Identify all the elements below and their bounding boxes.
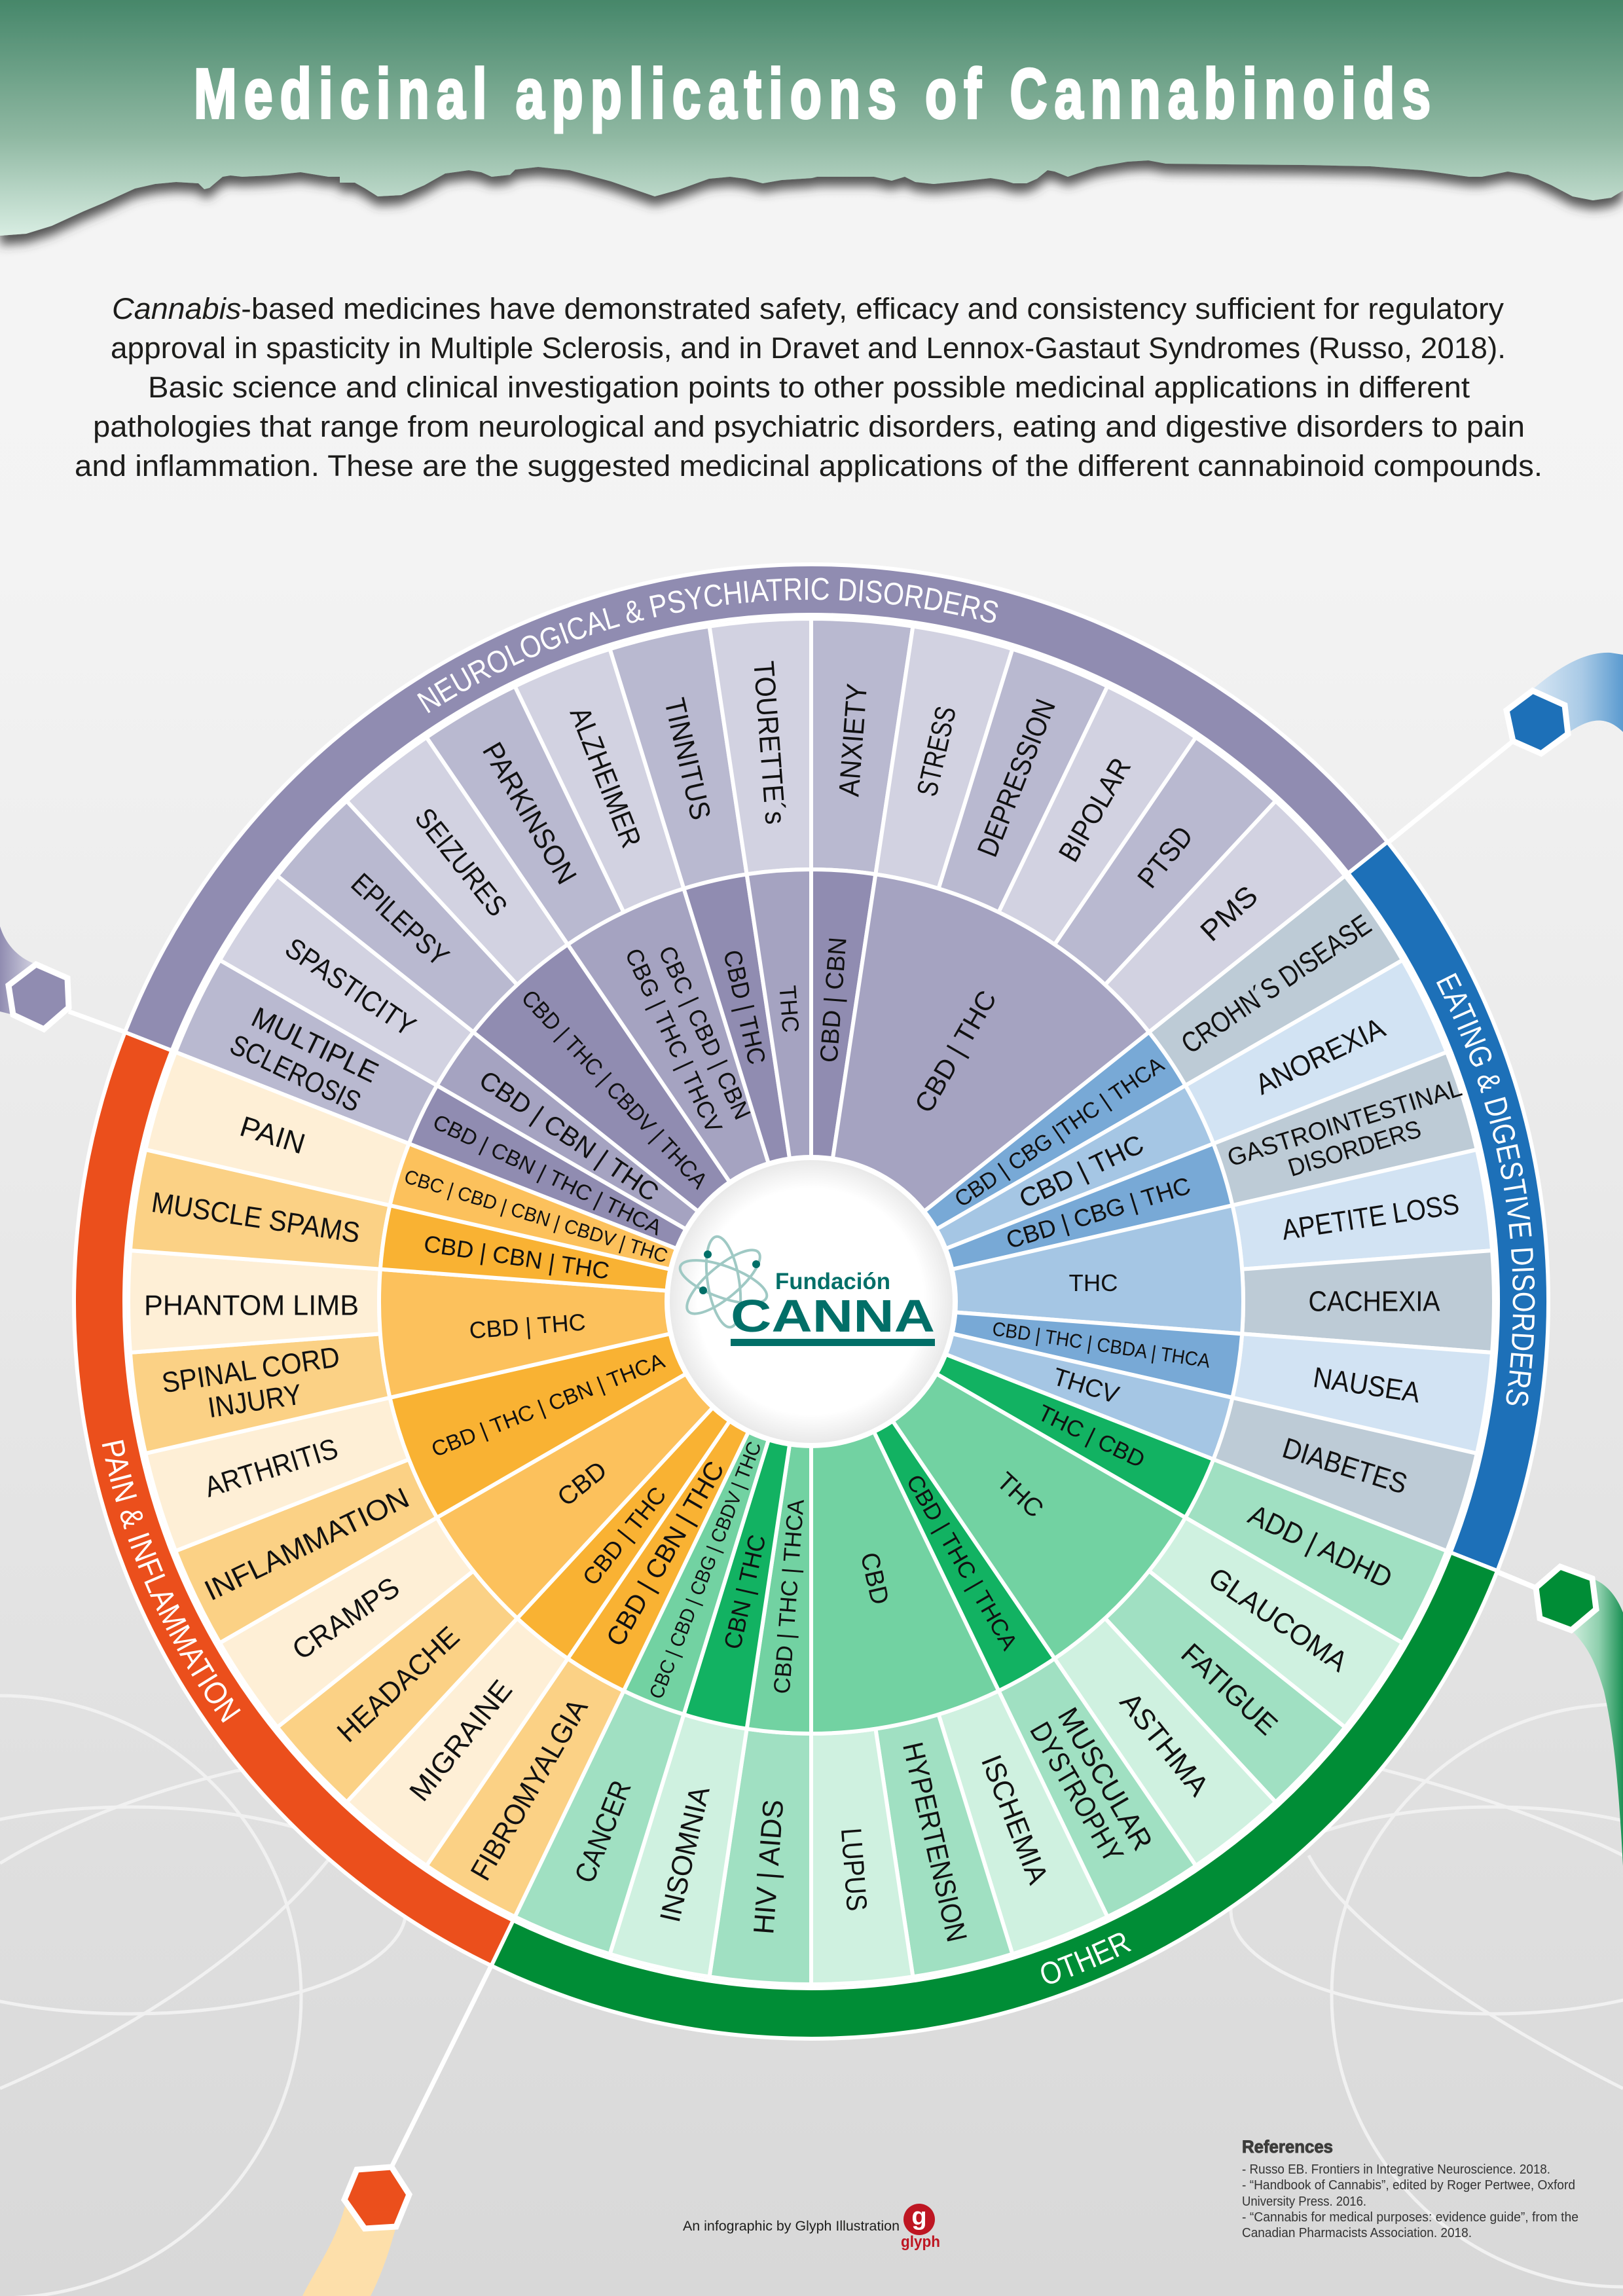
wedge: CBD CBN THC bbox=[437, 1030, 843, 1302]
segment: epilepsy: EPILEPSY bbox=[345, 867, 455, 973]
wedge: CBD THC: CBD | THC bbox=[1014, 1129, 1148, 1214]
wedge: CBD THC small bbox=[684, 869, 873, 1302]
segment: lupus bbox=[775, 1724, 913, 1992]
band: neurological and psychiatric disorders: NEUROLOGICAL & PSYCHIATRIC DISORDERS bbox=[417, 577, 998, 714]
segment: headache bbox=[272, 1546, 520, 1802]
segment: pms: PMS bbox=[1194, 880, 1264, 948]
segment: tinnitus bbox=[610, 619, 782, 893]
segment: multiple sclerosis: MULTIPLE bbox=[247, 1001, 383, 1089]
logo: Fundación CANNA bbox=[675, 1234, 935, 1346]
segment: add adhd: ADD | ADHD bbox=[1243, 1499, 1397, 1595]
segment: bipolar bbox=[996, 686, 1199, 960]
intro paragraph: pathologies that range from neurological and psychiatric disorders, eating and digestive disorders to pain bbox=[93, 410, 1525, 443]
wedge: CBC CBD CBN and CBG THC THCV bbox=[568, 873, 917, 1302]
segment: pain: PAIN bbox=[236, 1110, 309, 1161]
wedge: CBD CBG THC: CBD | CBG | THC bbox=[1003, 1172, 1194, 1254]
segment: cramps bbox=[214, 1488, 477, 1727]
ring: pain and inflammation conditions bbox=[122, 1050, 626, 1917]
wedge: CBD THC: CBD | THC bbox=[577, 1482, 672, 1590]
wedge: CBD THC large bbox=[811, 874, 1166, 1345]
connector: pain ribbon, line and hexagon bbox=[302, 1963, 492, 2296]
segment: asthma: ASTHMA bbox=[1114, 1686, 1215, 1802]
icon: atom bbox=[675, 1234, 772, 1330]
segment: nausea bbox=[1230, 1334, 1492, 1454]
segment: glaucoma: GLAUCOMA bbox=[1203, 1561, 1354, 1679]
segment: cachexia: CACHEXIA bbox=[1308, 1286, 1440, 1317]
band: pain and inflammation bbox=[72, 1031, 515, 1967]
wedge: THC CBD: THC | CBD bbox=[1034, 1400, 1149, 1473]
wedge: CBD CBN THC THCA bbox=[409, 1084, 835, 1302]
band: pain and inflammation: PAIN & INFLAMMATION bbox=[102, 1440, 241, 1723]
segment: insomnia bbox=[609, 1709, 748, 1977]
wedge: CBD THC CBN THCA bbox=[373, 1192, 811, 1518]
wedge: CBD THC CBDV THCA bbox=[473, 932, 890, 1302]
segment: cramps: CRAMPS bbox=[287, 1571, 405, 1666]
segment: cachexia bbox=[1237, 1250, 1500, 1371]
wedge: CBD CBN THC bbox=[566, 1273, 811, 1691]
segment: seizures bbox=[347, 732, 595, 989]
segment: stress: STRESS bbox=[911, 703, 962, 799]
title: Medicinal applications of Cannabinoids bbox=[194, 54, 1431, 134]
references: Canadian Pharmacists Association. 2018. bbox=[1242, 2226, 1472, 2240]
references bbox=[1242, 2137, 1578, 2240]
icon: glyph logo: glyph bbox=[901, 2233, 940, 2251]
wedge: CBC CBD CBG CBDV THC: CBC | CBD | CBG | CBDV | THC bbox=[646, 1438, 766, 1702]
logo underline bbox=[731, 1339, 935, 1346]
segment: muscular dystrophy: MUSCULAR bbox=[1051, 1702, 1159, 1856]
band: other: OTHER bbox=[1041, 1933, 1131, 1984]
segment: spinal cord injury bbox=[123, 1298, 395, 1453]
segment: anxiety: ANXIETY bbox=[833, 682, 873, 797]
segment: hypertension: HYPERTENSION bbox=[896, 1740, 973, 1945]
wedge: CBD CBG THC bbox=[811, 1144, 1237, 1362]
segment: spasticity: SPASTICITY bbox=[280, 932, 421, 1043]
segment: fatigue bbox=[1082, 1568, 1345, 1807]
connector: other ribbon, line and hexagon bbox=[1497, 1567, 1623, 1866]
segment: phantom limb: PHANTOM LIMB bbox=[144, 1290, 359, 1321]
ring: other conditions bbox=[513, 1457, 1447, 1992]
segment: cancer bbox=[513, 1680, 685, 1954]
wedge: CBD bbox=[642, 1302, 998, 1772]
wedge: CBD THC large: CBD | THC bbox=[909, 985, 1002, 1118]
segment: ptsd: PTSD bbox=[1131, 820, 1199, 894]
segment: migraine bbox=[342, 1597, 570, 1866]
segment: multiple sclerosis: SCLEROSIS bbox=[225, 1029, 366, 1118]
segment: gastrointestinal disorders: GASTROINTESTINAL bbox=[1224, 1074, 1465, 1173]
segment: hiv aids bbox=[710, 1729, 811, 1984]
wedge: CBD THC small: CBD | THC bbox=[718, 947, 771, 1067]
connector: eating ribbon, line and hexagon bbox=[1387, 653, 1623, 843]
references: - “Cannabis for medical purposes: evidence guide”, from the bbox=[1242, 2210, 1578, 2225]
segment: depression: DEPRESSION bbox=[972, 695, 1062, 862]
intro paragraph bbox=[75, 292, 1542, 483]
segment: fibromyalgia: FIBROMYALGIA bbox=[465, 1693, 594, 1886]
wedge: CBN THC bbox=[683, 1292, 811, 1729]
segment: tourette's: TOURETTE´s bbox=[747, 660, 792, 826]
segment: asthma bbox=[1027, 1614, 1275, 1871]
references: References bbox=[1242, 2137, 1333, 2157]
wedge: CBD THC CBDA THCA: CBD | THC | CBDA | THCA bbox=[991, 1318, 1212, 1372]
decorative atom line art, bottom left bbox=[0, 1696, 406, 2296]
references: - “Handbook of Cannabis”, edited by Roger Pertwee, Oxford bbox=[1242, 2178, 1575, 2193]
segment: spinal cord injury: INJURY bbox=[206, 1378, 304, 1424]
segment: anxiety bbox=[811, 619, 913, 874]
wedge: CBC CBD CBN and CBG THC THCV: CBG | THC | THCV bbox=[620, 944, 728, 1137]
wedge: CBD: CBD bbox=[553, 1456, 612, 1512]
inner ring: eating cannabinoids bbox=[797, 1032, 1261, 1461]
segment: epilepsy bbox=[278, 796, 541, 1035]
segment: insomnia: INSOMNIA bbox=[654, 1783, 716, 1925]
segment: fibromyalgia bbox=[423, 1643, 626, 1917]
wedge: CBD CBN bbox=[811, 869, 875, 1302]
segment: alzheimer bbox=[515, 642, 718, 917]
segment: tourette's bbox=[710, 611, 848, 879]
segment: spasticity bbox=[220, 872, 492, 1088]
segment: hiv aids: HIV | AIDS bbox=[748, 1798, 790, 1935]
segment: tinnitus: TINNITUS bbox=[658, 695, 717, 823]
wedge: CBD CBN THC THCA: CBD | CBN | THC | THCA bbox=[429, 1109, 666, 1240]
wedge: CBD CBN: CBD | CBN bbox=[815, 936, 852, 1064]
segment: apetite loss bbox=[1228, 1150, 1499, 1305]
wedge: THCV: THCV bbox=[1049, 1363, 1123, 1410]
segment: headache: HEADACHE bbox=[331, 1620, 465, 1749]
intro paragraph: approval in spasticity in Multiple Sclerosis, and in Dravet and Lennox-Gastaut Syndromes (Russo, 2018). bbox=[111, 331, 1506, 365]
intro paragraph: and inflammation. These are the suggested medicinal applications of the different cannabinoid compounds. bbox=[75, 449, 1542, 483]
centre disc bbox=[665, 1155, 958, 1448]
segment: muscular dystrophy bbox=[968, 1654, 1196, 1923]
wedge: CBD THC bbox=[515, 1266, 811, 1658]
header banner with torn edge bbox=[0, 0, 1623, 236]
wedge: CBD THC THCA bbox=[758, 1302, 1055, 1695]
band: other bbox=[492, 1552, 1498, 2041]
segment: inflammation bbox=[169, 1427, 441, 1643]
segment: parkinson bbox=[426, 680, 655, 949]
references: - Russo EB. Frontiers in Integrative Neuroscience. 2018. bbox=[1242, 2162, 1550, 2177]
wedge: THC: THC bbox=[991, 1467, 1049, 1523]
segment: anorexia: ANOREXIA bbox=[1250, 1011, 1391, 1101]
wedge: CBD CBN THC: CBD | CBN | THC bbox=[601, 1457, 730, 1651]
segment: muscular dystrophy: DYSTROPHY bbox=[1023, 1717, 1129, 1868]
segment: inflammation: INFLAMMATION bbox=[200, 1482, 414, 1607]
band: eating and digestive disorders: EATING & DIGESTIVE DISORDERS bbox=[1436, 973, 1535, 1406]
wedge: CBD THC CBDA THCA bbox=[807, 1302, 1242, 1398]
segment: phantom limb bbox=[122, 1232, 385, 1353]
wedge: CBD THC: CBD | THC bbox=[468, 1308, 587, 1344]
wedge: THC bbox=[718, 1302, 1186, 1680]
wedge: THC bbox=[811, 1205, 1261, 1426]
segment: gastrointestinal disorders: DISORDERS bbox=[1285, 1116, 1425, 1182]
inner ring: pain cannabinoids bbox=[361, 1142, 826, 1691]
segment: pain bbox=[145, 1050, 417, 1207]
intro paragraph: Cannabis-based medicines have demonstrated safety, efficacy and consistency sufficient for regulatory bbox=[112, 292, 1504, 325]
wedge: CBC CBD CBN CBDV THC: CBC | CBD | CBN | CBDV | THC bbox=[401, 1166, 670, 1267]
wedge: CBD THC CBDV THCA: CBD | THC | CBDV | THCA bbox=[517, 985, 712, 1194]
segment: anorexia bbox=[1181, 960, 1453, 1176]
wedge: CBD THC THCA: CBD | THC | THCA bbox=[902, 1470, 1023, 1654]
wedge: CBD THC THCA bbox=[747, 1302, 811, 1734]
segment: hypertension bbox=[840, 1710, 1012, 1984]
wedge: THC: THC bbox=[1069, 1269, 1118, 1296]
segment: nausea: NAUSEA bbox=[1311, 1361, 1423, 1409]
segment: bipolar: BIPOLAR bbox=[1053, 753, 1137, 867]
credit: Glyph Illustration: An infographic by Glyph Illustration bbox=[683, 2219, 900, 2234]
icon: glyph logo bbox=[901, 2203, 940, 2251]
wedge: THC: THC bbox=[774, 985, 805, 1034]
segment: crohn's disease bbox=[1145, 876, 1408, 1115]
segment: stress bbox=[875, 627, 1013, 894]
wedge: CBD CBN THC: CBD | CBN | THC bbox=[422, 1230, 611, 1285]
segment: arthritis: ARTHRITIS bbox=[201, 1432, 342, 1504]
wedge: CBD THC THCA: CBD | THC | THCA bbox=[769, 1498, 809, 1695]
wedge: CBD CBG THC THCA bbox=[811, 1032, 1189, 1352]
segment: cancer: CANCER bbox=[569, 1776, 638, 1887]
wedge: CBC CBD CBN and CBG THC THCV: CBC | CBD | CBN bbox=[653, 941, 756, 1123]
segment: parkinson: PARKINSON bbox=[476, 737, 583, 890]
wedge: CBD CBG THC THCA: CBD | CBG |THC | THCA bbox=[950, 1052, 1169, 1212]
icon: glyph logo: g bbox=[911, 2203, 927, 2231]
segment: muscle spams bbox=[130, 1149, 393, 1269]
segment: glaucoma bbox=[1130, 1515, 1402, 1731]
segment: ischemia: ISCHEMIA bbox=[975, 1751, 1054, 1889]
band: eating and digestive disorders bbox=[1348, 842, 1550, 1570]
decorative atom line art, bottom right bbox=[1231, 1704, 1623, 2287]
segment: ischemia bbox=[905, 1686, 1108, 1961]
inner ring: neurological cannabinoids bbox=[409, 865, 1166, 1345]
segment: muscle spams: MUSCLE SPAMS bbox=[149, 1186, 362, 1249]
wedge: CBD THC bbox=[361, 1177, 811, 1398]
wedge: CBD CBN THC bbox=[380, 1205, 816, 1302]
logo wordmark: CANNA: CANNA bbox=[731, 1290, 935, 1341]
wedge: THCV bbox=[797, 1302, 1232, 1461]
references: University Press. 2016. bbox=[1242, 2195, 1366, 2209]
segment: diabetes: DIABETES bbox=[1279, 1432, 1411, 1501]
connector: neurological ribbon, line and hexagon bbox=[0, 926, 124, 1032]
wedge: THC CBD bbox=[788, 1302, 1213, 1520]
wedge: CBD CBN THC: CBD | CBN | THC bbox=[474, 1065, 664, 1207]
segment: apetite loss: APETITE LOSS bbox=[1280, 1188, 1461, 1247]
segment: add adhd bbox=[1172, 1457, 1447, 1646]
wedge: CBN THC: CBN | THC bbox=[719, 1532, 771, 1652]
wedge: CBD: CBD bbox=[855, 1550, 894, 1607]
segment: spinal cord injury: SPINAL CORD bbox=[160, 1341, 342, 1399]
logo wordmark: Fundación: Fundación bbox=[775, 1269, 890, 1294]
segment: arthritis bbox=[138, 1363, 413, 1551]
wedge: CBD THC bbox=[811, 1085, 1218, 1357]
wedge: CBD THC CBN THCA: CBD | THC | CBN | THCA bbox=[428, 1348, 668, 1461]
wedge: CBC CBD CBN CBDV THC bbox=[390, 1142, 826, 1302]
segment: multiple sclerosis bbox=[175, 957, 450, 1146]
segment: fatigue: FATIGUE bbox=[1175, 1637, 1283, 1741]
segment: migraine: MIGRAINE bbox=[403, 1674, 519, 1807]
intro paragraph: Basic science and clinical investigation points to other possible medicinal applications in different bbox=[148, 371, 1470, 404]
segment: gastrointestinal disorders bbox=[1209, 1052, 1484, 1240]
segment: ptsd bbox=[1052, 737, 1280, 1006]
segment: lupus: LUPUS bbox=[835, 1827, 873, 1912]
ring: eating and digestive conditions bbox=[1145, 876, 1500, 1553]
segment: pms bbox=[1102, 801, 1350, 1057]
wedge: CBD bbox=[424, 1215, 811, 1618]
segment: alzheimer: ALZHEIMER bbox=[564, 702, 647, 852]
segment: diabetes bbox=[1205, 1396, 1477, 1553]
ring: neurological and psychiatric conditions bbox=[175, 611, 1350, 1146]
inner ring: other cannabinoids bbox=[622, 1283, 1213, 1772]
segment: depression bbox=[937, 649, 1110, 923]
segment: crohn's disease: CROHN´S DISEASE bbox=[1176, 909, 1377, 1060]
wedge: CBC CBD CBG CBDV THC bbox=[622, 1283, 811, 1715]
segment: seizures: SEIZURES bbox=[409, 802, 513, 922]
wedge: THC bbox=[747, 865, 875, 1302]
